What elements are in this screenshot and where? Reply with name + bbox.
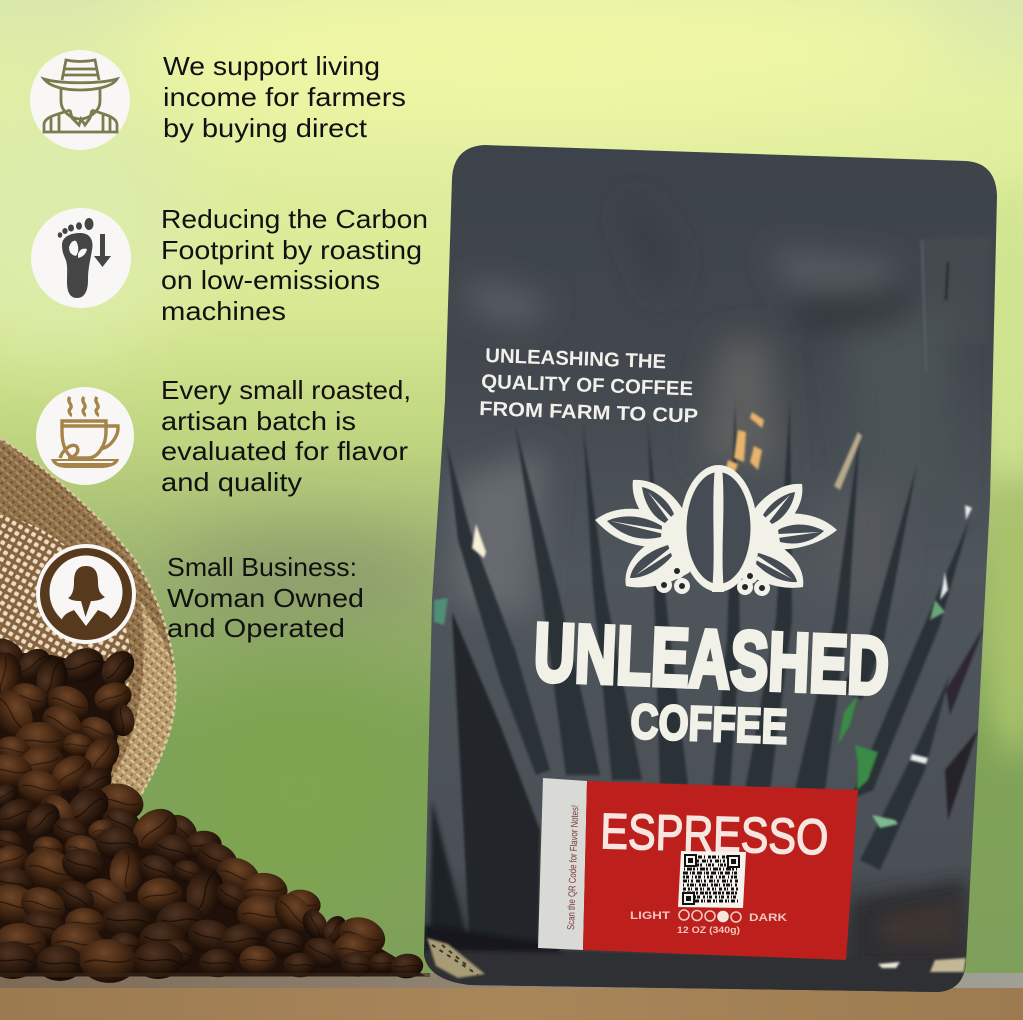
caption: evaluated for flavor [161,436,408,466]
logo: coffee bean with leaves [595,465,837,596]
caption: We support living [163,51,380,81]
product name: ESPRESSO [600,803,829,865]
dark leaf insets [607,472,824,591]
caption [161,375,411,497]
feature 3: batch quality [36,375,411,497]
icon: footprint with down arrow [31,208,131,308]
net weight: 12 OZ (340g) [677,925,740,935]
brand name [532,607,891,754]
bag tagline [479,345,698,428]
white logo silhouette [595,465,837,596]
feature 1: living income [30,50,406,150]
coffee bean pile [0,632,430,985]
espresso label [538,778,858,960]
icon: farmer [30,50,130,150]
brand name: COFFEE [630,695,788,754]
leaf veins and bean stripe [610,466,820,592]
caption [163,51,406,143]
caption: Woman Owned [167,583,364,613]
icon: businesswoman [36,544,136,644]
caption: Small Business: [167,552,357,582]
QR code [678,851,746,908]
caption [167,552,364,643]
wooden table [0,973,1023,1020]
bag body [424,145,997,992]
coffee bag [424,145,997,995]
caption: Reducing the Carbon [161,204,428,234]
caption: Every small roasted, [161,375,411,405]
bag tagline: QUALITY OF COFFEE [481,371,693,400]
burlap sack [0,438,175,812]
caption: Footprint by roasting [161,235,422,265]
white side strip [538,778,587,950]
caption: artisan batch is [161,406,356,436]
caption: and quality [161,467,302,497]
roast scale: DARK [749,912,787,924]
bag tagline: UNLEASHING THE [485,345,666,373]
bag tagline: FROM FARM TO CUP [479,398,698,428]
icon: coffee cup [36,387,134,485]
roast scale [630,910,787,924]
caption: and Operated [167,613,345,643]
caption: on low-emissions [161,265,380,295]
red panel [583,781,858,960]
feature 4: woman owned [36,544,364,644]
roast scale: LIGHT [630,910,670,922]
caption [161,204,428,326]
side strip text: Scan the QR Code for Flavor Notes! [566,805,581,930]
caption: machines [161,296,286,326]
feature 2: carbon footprint [31,204,428,326]
caption: by buying direct [163,113,368,143]
caption: income for farmers [163,82,406,112]
bag folds, rays and reflections [424,200,992,995]
